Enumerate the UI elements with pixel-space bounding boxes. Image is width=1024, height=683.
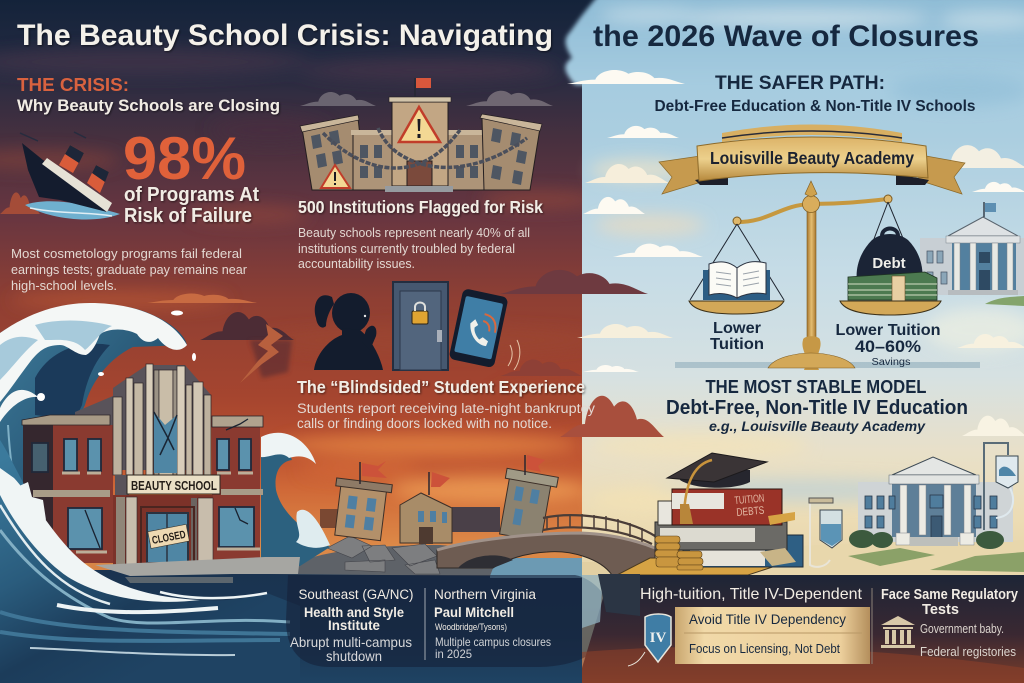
illustration: cracked buildings and lowered flags on the shore bbox=[270, 455, 558, 576]
text: savings label: Savings bbox=[872, 357, 910, 368]
storm clouds on the left panel bbox=[0, 91, 664, 437]
text: regulatory heading bbox=[881, 587, 1018, 618]
stat: 98 percent: Risk of Failure bbox=[124, 205, 252, 227]
icon: locked door bbox=[393, 282, 448, 370]
illustration: balance scale bbox=[675, 181, 980, 370]
icon: lightning bolt bbox=[240, 324, 283, 383]
title: left half: The Beauty School Crisis: Navigating bbox=[17, 19, 553, 52]
panel: the crisis heading: Why Beauty Schools are Closing bbox=[17, 96, 280, 115]
text: high-tuition heading: High-tuition, Title IV-Dependent bbox=[640, 586, 863, 603]
text: lower tuition label: Lower bbox=[713, 320, 761, 337]
text: regulatory heading: Tests bbox=[922, 602, 959, 618]
right landscape ground bbox=[582, 540, 1024, 576]
text: blindsided student experience: The “Blindsided” Student Experience bbox=[297, 377, 585, 397]
icon: ringing phone bbox=[449, 288, 520, 370]
text: cosmetology earnings note: earnings tests; graduate pay remains near bbox=[11, 262, 248, 277]
text: southeast closure: Abrupt multi-campus bbox=[290, 634, 412, 650]
label: tuition debts bbox=[734, 493, 766, 519]
text: 500 institutions flagged bbox=[298, 197, 543, 271]
text: southeast closure: Southeast (GA/NC) bbox=[298, 587, 414, 602]
text: 500 institutions flagged: 500 Institutions Flagged for Risk bbox=[298, 197, 543, 217]
text: blindsided student experience: calls or finding doors locked with no notice. bbox=[297, 416, 552, 431]
bottom right panel bbox=[582, 574, 1024, 683]
icon: debt weight with money bbox=[848, 228, 937, 301]
text: regulatory notes bbox=[920, 622, 1016, 659]
text: lower tuition label bbox=[710, 320, 764, 353]
background: clear sky right half bbox=[565, 0, 1024, 683]
background: stormy sky left half bbox=[0, 0, 610, 683]
illustration: giant wave front and foam bbox=[0, 440, 300, 683]
sign: beauty school: BEAUTY SCHOOL bbox=[131, 479, 217, 493]
banner: louisville beauty academy ribbon: Louisville Beauty Academy bbox=[710, 148, 914, 168]
illustration: government building with IV drip bbox=[849, 443, 1018, 549]
text: savings label: Lower Tuition bbox=[836, 322, 940, 339]
illustration: stone bridge bbox=[437, 514, 655, 575]
panel: the safer path heading: Debt-Free Education & Non-Title IV Schools bbox=[654, 98, 976, 115]
text: regulatory notes: Government baby. bbox=[920, 622, 1004, 636]
text: northern virginia closure: Northern Virginia bbox=[434, 587, 536, 602]
icon: left pan bbox=[689, 301, 784, 314]
panel: the safer path heading bbox=[654, 73, 976, 115]
text: the most stable model bbox=[666, 377, 968, 434]
illustration: sidewalk bbox=[95, 557, 300, 583]
text: northern virginia closure: in 2025 bbox=[435, 647, 472, 661]
callout: parchment panel: Avoid Title IV Dependency bbox=[689, 611, 846, 627]
text: blindsided student experience bbox=[297, 377, 595, 431]
text: 500 institutions flagged: accountability issues. bbox=[298, 256, 415, 271]
icon: IV shield: IV bbox=[650, 630, 667, 646]
main title bbox=[17, 19, 979, 53]
text: the most stable model: THE MOST STABLE MODEL bbox=[706, 377, 926, 397]
text: southeast closure bbox=[290, 587, 414, 664]
stat: 98 percent: 98% bbox=[123, 125, 246, 192]
panel: the crisis heading bbox=[17, 74, 280, 115]
illustration: giant wave rear bbox=[0, 303, 196, 535]
icon: debt weight with money: Debt bbox=[872, 255, 906, 272]
background: sea across the bottom bbox=[94, 558, 582, 683]
text: savings label bbox=[836, 322, 940, 368]
text: 500 institutions flagged: Beauty schools represent nearly 40% of all bbox=[298, 225, 530, 240]
stat: 98 percent bbox=[123, 125, 259, 227]
text: cosmetology earnings note: high-school levels. bbox=[11, 278, 117, 293]
text: southeast closure: Health and Style bbox=[304, 604, 404, 620]
icon: right pan bbox=[840, 301, 941, 315]
sign: closed bbox=[148, 524, 189, 548]
text: cosmetology earnings note bbox=[11, 246, 248, 293]
text: northern virginia closure: Multiple campus closures bbox=[435, 635, 551, 649]
sign: closed: CLOSED bbox=[151, 529, 187, 547]
illustration: books, cap, coins and IV bag bbox=[617, 453, 842, 575]
icon: government temple bbox=[881, 616, 915, 648]
icon: IV shield bbox=[628, 614, 671, 666]
text: lower tuition label: Tuition bbox=[710, 336, 764, 353]
illustration: building beside the scale bbox=[920, 202, 1024, 306]
text: northern virginia closure bbox=[434, 587, 551, 661]
text: the most stable model: e.g., Louisville Beauty Academy bbox=[709, 418, 926, 434]
illustration: blindsided student silhouette, locked door, phone bbox=[314, 282, 520, 370]
panel: the crisis heading: THE CRISIS: bbox=[17, 74, 129, 95]
text: regulatory notes: Federal registories bbox=[920, 645, 1016, 659]
panel: the safer path heading: THE SAFER PATH: bbox=[715, 73, 885, 94]
text: 500 institutions flagged: institutions currently troubled by federal bbox=[298, 241, 515, 256]
sign: beauty school bbox=[127, 475, 220, 494]
callout: parchment panel: Focus on Licensing, Not Debt bbox=[689, 641, 840, 656]
text: savings label: 40–60% bbox=[855, 338, 921, 356]
silhouette: student bbox=[314, 293, 383, 370]
title: right half: the 2026 Wave of Closures bbox=[593, 20, 979, 53]
text: northern virginia closure: Woodbridge/Tysons) bbox=[435, 622, 507, 633]
illustration: closed beauty school bbox=[22, 364, 263, 567]
text: the most stable model: Debt-Free, Non-Title IV Education bbox=[666, 397, 968, 419]
illustration: small breaking wave bbox=[261, 433, 330, 566]
text: blindsided student experience: Students report receiving late-night bankruptcy bbox=[297, 401, 595, 416]
stat: 98 percent: of Programs At bbox=[124, 184, 259, 206]
dark panel: regional closures bbox=[286, 575, 613, 667]
callout: parchment panel bbox=[675, 607, 870, 664]
text: southeast closure: shutdown bbox=[326, 648, 382, 664]
icon: sinking ship bbox=[20, 132, 120, 220]
label: tuition debts: DEBTS bbox=[736, 505, 765, 519]
text: cosmetology earnings note: Most cosmetology programs fail federal bbox=[11, 246, 242, 261]
icon: open book bbox=[703, 262, 770, 300]
text: northern virginia closure: Paul Mitchell bbox=[434, 604, 514, 620]
text: southeast closure: Institute bbox=[328, 617, 380, 633]
banner: louisville beauty academy ribbon bbox=[659, 124, 965, 194]
label: tuition debts: TUITION bbox=[734, 493, 765, 507]
illustration: chained flagged institutions bbox=[300, 78, 542, 192]
